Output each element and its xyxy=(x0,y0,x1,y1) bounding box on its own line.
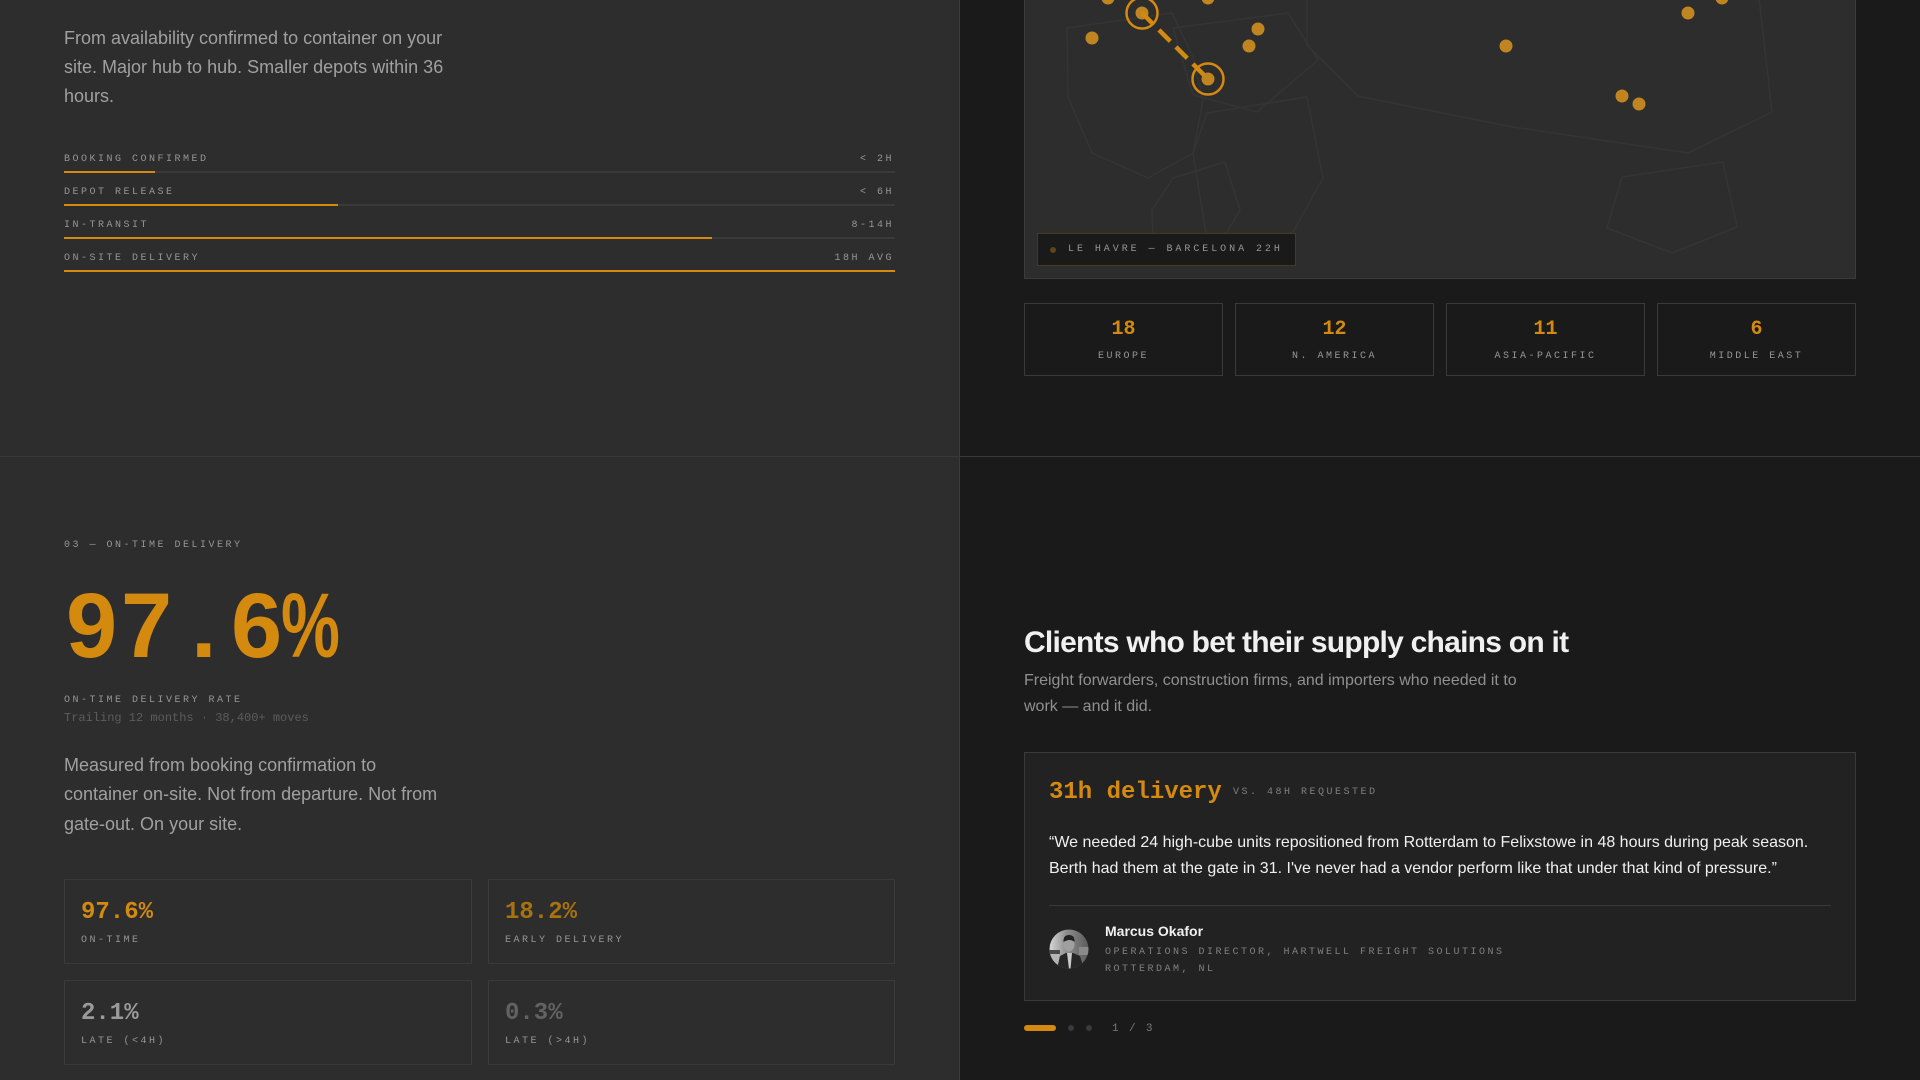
text block: measurement note: Measured from booking confirmation to xyxy=(64,755,376,775)
big number: 7 xyxy=(121,575,172,677)
text block: measurement note xyxy=(64,755,437,834)
subheading: Freight forwarders, construction firms, and importers who needed it to xyxy=(1024,672,1517,689)
client role xyxy=(1105,947,1505,975)
quote: “We needed 24 high-cube units repositioned from Rotterdam to Felixstowe in 48 hours during peak season. xyxy=(1049,834,1808,851)
panel: network map and regional counts xyxy=(960,0,1920,457)
progress row: on-site delivery xyxy=(64,253,895,272)
divider xyxy=(1049,905,1831,906)
stat card: Europe: EUROPE xyxy=(1098,351,1149,362)
client role: ROTTERDAM, NL xyxy=(1105,964,1216,975)
progress row: in-transit: IN-TRANSIT xyxy=(64,220,149,231)
kpi: late over 4h: LATE (>4H) xyxy=(505,1036,590,1047)
text block: measurement note: gate-out. On your site. xyxy=(64,814,242,834)
map landmasses xyxy=(1067,0,1772,253)
inactive dot xyxy=(1068,1025,1074,1031)
client role: OPERATIONS DIRECTOR, HARTWELL FREIGHT SOLUTIONS xyxy=(1105,947,1505,958)
text block: transit description: From availability confirmed to container on your xyxy=(64,28,442,48)
big number: % xyxy=(281,575,340,677)
progress row: in-transit: 8-14H xyxy=(851,220,894,231)
stat card: Asia-Pacific: ASIA-PACIFIC xyxy=(1494,351,1596,362)
chart: route map xyxy=(1024,0,1856,279)
metric sub caption: Trailing 12 months · 38,400+ moves xyxy=(64,711,309,725)
active indicator xyxy=(1024,1025,1056,1031)
client name: Marcus Okafor xyxy=(1105,923,1203,939)
progress row: depot release xyxy=(64,187,895,206)
kpi: late under 4h: LATE (<4H) xyxy=(81,1036,166,1047)
progress row: depot release: < 6H xyxy=(860,187,894,198)
subheading xyxy=(1024,672,1517,715)
progress row: booking confirmed: BOOKING CONFIRMED xyxy=(64,154,209,165)
progress row: on-site delivery: ON-SITE DELIVERY xyxy=(64,253,200,264)
stat card: Middle East xyxy=(1657,303,1856,376)
stat card: N. America: 12 xyxy=(1322,318,1346,341)
kpi: early delivery: 18.2% xyxy=(505,899,577,926)
quote: Berth had them at the gate in 31. I've never had a vendor perform like that under that kind of pressure.” xyxy=(1049,860,1777,877)
icon: client portrait xyxy=(1050,930,1088,968)
kpi: late over 4h xyxy=(488,980,895,1065)
kpi: early delivery: EARLY DELIVERY xyxy=(505,935,624,946)
kpi: late under 4h xyxy=(64,980,472,1065)
carousel pagination xyxy=(1024,1023,1154,1035)
progress row: in-transit xyxy=(64,220,895,239)
stat card: N. America: N. AMERICA xyxy=(1292,351,1377,362)
heading: Clients who bet their supply chains on it xyxy=(1024,626,1568,659)
quote xyxy=(1049,834,1808,877)
stat card: Asia-Pacific xyxy=(1446,303,1645,376)
kpi: on-time: 97.6% xyxy=(81,899,153,926)
panel: client testimonials xyxy=(1024,630,1856,1031)
stat card: Middle East: MIDDLE EAST xyxy=(1710,351,1803,362)
progress row: on-site delivery: 18H AVG xyxy=(834,253,894,264)
legend text: LE HAVRE — BARCELONA 22H xyxy=(1068,244,1283,255)
highlighted route xyxy=(1126,0,1224,94)
text block: measurement note: container on-site. Not from departure. Not from xyxy=(64,784,437,804)
panel: transit timeline xyxy=(0,0,960,457)
kpi: early delivery xyxy=(488,879,895,964)
eyebrow label: 03 — ON-TIME DELIVERY xyxy=(64,540,243,551)
big number: 9 xyxy=(66,575,117,677)
progress row: booking confirmed xyxy=(64,154,895,173)
text block: transit description xyxy=(64,28,443,106)
kpi: late over 4h: 0.3% xyxy=(505,1000,563,1027)
stat card: Asia-Pacific: 11 xyxy=(1533,318,1558,341)
result comparison: VS. 48H REQUESTED xyxy=(1233,787,1378,798)
hub dots xyxy=(1086,0,1728,110)
page counter: 1 / 3 xyxy=(1112,1023,1154,1035)
inactive dot xyxy=(1086,1025,1092,1031)
big number: . xyxy=(191,575,217,677)
progress row: booking confirmed: < 2H xyxy=(860,154,894,165)
kpi: late under 4h: 2.1% xyxy=(81,1000,139,1027)
text block: transit description: site. Major hub to hub. Smaller depots within 36 xyxy=(64,57,443,77)
text block: transit description: hours. xyxy=(64,86,114,106)
testimonial card xyxy=(1024,752,1856,1001)
big number: 6 xyxy=(231,575,282,677)
kpi: on-time xyxy=(64,879,472,964)
panel: on-time delivery xyxy=(0,457,960,1080)
legend dot xyxy=(1050,247,1056,253)
stat card: N. America xyxy=(1235,303,1434,376)
result headline: 31h delivery xyxy=(1049,779,1222,806)
stat card: Middle East: 6 xyxy=(1750,318,1762,341)
big number xyxy=(66,575,340,677)
subheading: work — and it did. xyxy=(1024,698,1152,715)
stat card: Europe xyxy=(1024,303,1223,376)
stat card: Europe: 18 xyxy=(1111,318,1136,341)
kpi: on-time: ON-TIME xyxy=(81,935,141,946)
map legend: route label xyxy=(1037,233,1296,266)
progress row: depot release: DEPOT RELEASE xyxy=(64,187,175,198)
metric caption: ON-TIME DELIVERY RATE xyxy=(64,695,243,706)
